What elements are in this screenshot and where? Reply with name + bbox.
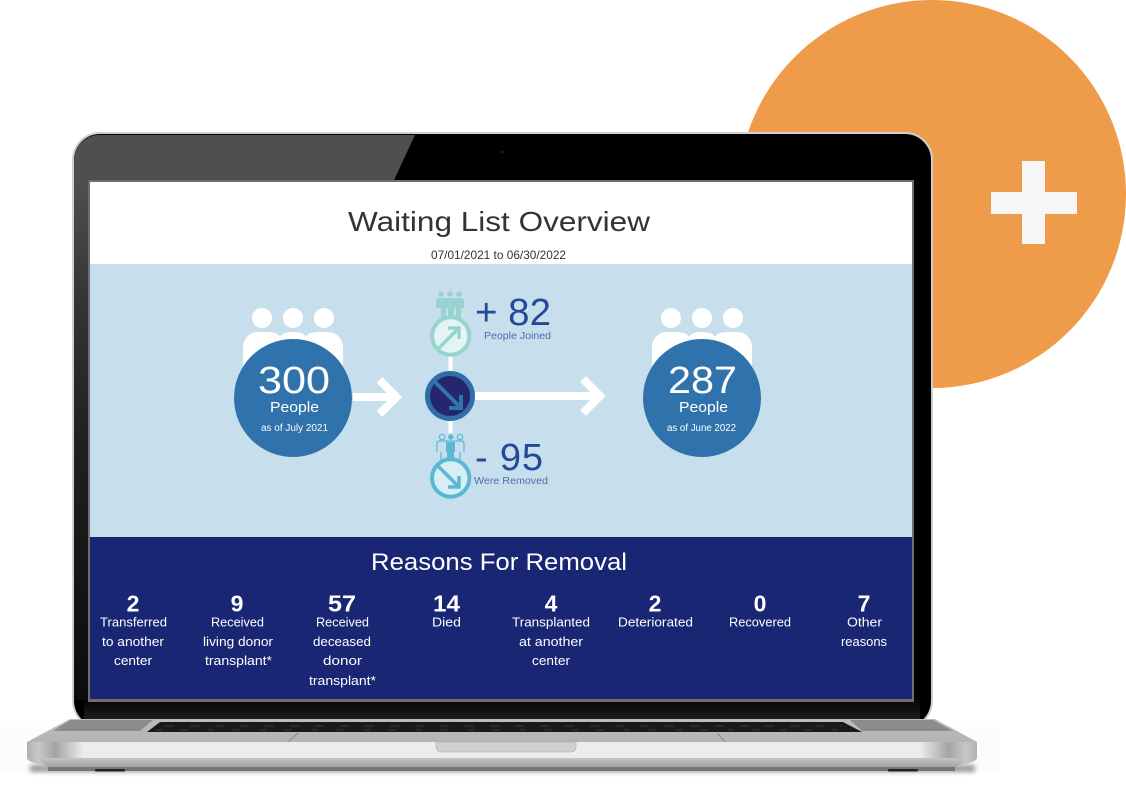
panel: reasons for removal (90, 537, 912, 699)
reason: deceased donor: donor (323, 653, 363, 668)
reason: transferred: Transferred (100, 614, 167, 630)
reason: other (841, 590, 887, 649)
reason: deceased donor: Received (316, 614, 369, 630)
reason: living donor: Received (211, 614, 264, 630)
reason: transplanted elsewhere: at another (519, 634, 584, 649)
title: Waiting List Overview (348, 206, 651, 237)
stat: 300 people: 300 (258, 360, 330, 402)
orange circle badge (738, 0, 1126, 388)
stat: 300 people: People (270, 399, 319, 416)
reason: deceased donor: transplant* (309, 673, 376, 688)
date range: 07/01/2021 to 06/30/2022 (431, 248, 566, 262)
reason: recovered (729, 590, 791, 630)
reason: living donor: transplant* (205, 653, 272, 668)
laptop base haze (0, 727, 1000, 773)
laptop (0, 133, 1000, 773)
reason: other: Other (847, 614, 883, 630)
heading: Reasons For Removal (371, 549, 627, 576)
arrow: into change node (353, 380, 396, 414)
reason: recovered: 0 (754, 590, 766, 616)
reason: recovered: Recovered (729, 614, 791, 630)
panel: overview flow (90, 264, 912, 537)
stat: people removed: - 95 (475, 437, 543, 479)
stat: people joined: + 82 (475, 292, 551, 334)
reason: died: Died (432, 614, 461, 630)
stat: 287 people (643, 339, 761, 457)
icon: removed people (437, 434, 464, 461)
reason: transplanted elsewhere (512, 590, 590, 668)
stat: people removed: Were Removed (474, 476, 548, 487)
screen (90, 182, 912, 699)
connector lines (448, 356, 452, 433)
stat: 300 people (234, 339, 352, 457)
icon: plus sign (991, 161, 1077, 244)
icon: net change node (428, 374, 472, 418)
reason: transferred: center (114, 653, 153, 668)
reason: living donor (203, 590, 274, 668)
reason: living donor: living donor (203, 634, 274, 649)
reason: deceased donor: deceased (313, 634, 371, 649)
reason: transferred: 2 (127, 590, 139, 616)
reason: died: 14 (433, 590, 460, 616)
reason: transplanted elsewhere: 4 (545, 590, 558, 616)
icon: joined arrow circle (432, 317, 469, 355)
stat: 287 people: as of June 2022 (667, 423, 736, 434)
header panel (90, 182, 912, 264)
icon: ending people group (652, 308, 752, 375)
reason: transplanted elsewhere: center (532, 653, 571, 668)
stat: 287 people: 287 (668, 360, 737, 402)
reason: deteriorated: 2 (649, 590, 661, 616)
laptop base shadow (30, 765, 975, 772)
reason: deceased donor: 57 (328, 590, 356, 616)
arrow: out of change node (475, 379, 600, 413)
stat: people joined: People Joined (484, 331, 551, 342)
reason: deceased donor (309, 590, 376, 688)
stat: 287 people: People (679, 399, 728, 416)
reason: other: reasons (841, 634, 887, 649)
icon: removed arrow circle (432, 459, 469, 497)
laptop lid (73, 133, 932, 720)
laptop deck and keyboard (27, 719, 977, 742)
reason: living donor: 9 (231, 590, 243, 616)
icon: starting people group (243, 308, 343, 375)
reason: other: 7 (858, 590, 870, 616)
reason: transplanted elsewhere: Transplanted (512, 614, 590, 630)
stat: 300 people: as of July 2021 (261, 423, 328, 434)
reason: died (432, 590, 461, 630)
reason: transferred (100, 590, 167, 668)
reason: deteriorated (618, 590, 693, 630)
reason: transferred: to another (102, 634, 165, 649)
reason: deteriorated: Deteriorated (618, 614, 693, 630)
laptop front edge (27, 742, 977, 772)
icon: joined people (436, 291, 464, 318)
